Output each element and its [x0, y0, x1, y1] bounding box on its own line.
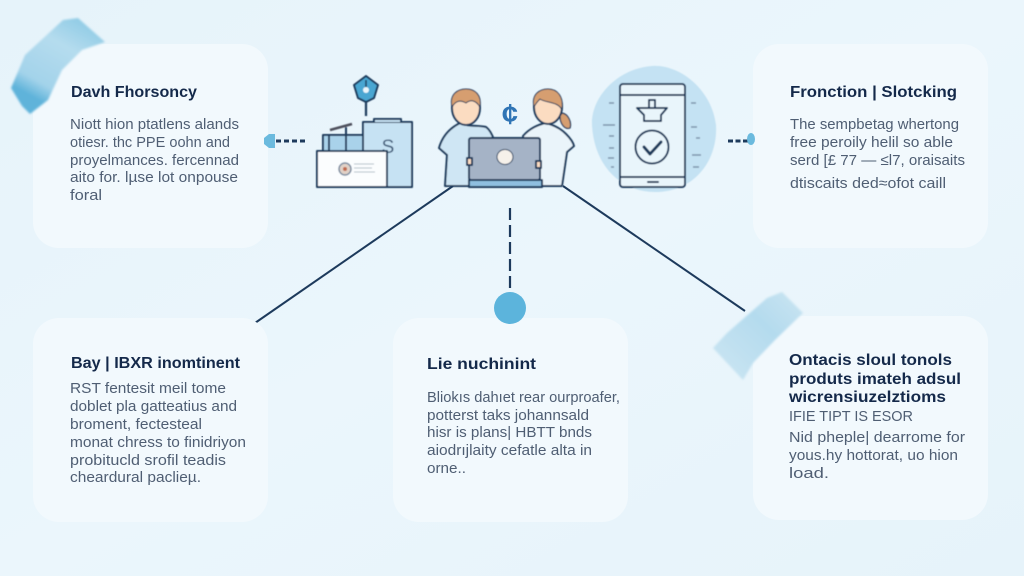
icon: boxes and document: S: [382, 137, 394, 158]
text block: bottom center card: Bliokıs dahıet rear ourproafer,: [427, 389, 620, 406]
panel: top right card: [753, 44, 988, 248]
connector: center dashed line: [509, 208, 511, 291]
text block: bottom left card: doblet pla gatteatius and: [70, 398, 237, 415]
text block: bottom left card: probitucld srofil teadis: [70, 452, 226, 469]
hands: [467, 158, 541, 168]
arrow: left dashed connector with dot: [264, 134, 306, 148]
text block: top left card: Niott hion ptatlens alands: [70, 116, 239, 133]
text block: bottom left card: RST fentesit meil tome: [70, 380, 226, 397]
panel: bottom center card: [393, 318, 628, 522]
panel: top left card: [33, 44, 268, 248]
text block: bottom right card: yous.hy hottorat, uo hion: [789, 447, 958, 464]
text block: bottom right card: load.: [789, 465, 829, 482]
panel: bottom left card: [33, 318, 268, 522]
heading: bottom right card: Ontacis sloul tonols: [789, 352, 952, 369]
right person: [523, 89, 574, 186]
text block: bottom center card: potterst taks johannsald: [427, 407, 589, 424]
text block: bottom left card: broment, fectesteal: [70, 416, 202, 433]
icon: boxes and document: [317, 119, 412, 187]
text block: top right card: serd [£ 77 — ≤l7, oraisaits: [790, 152, 965, 169]
text block: top left card: otiesr. thc PPE oohn and: [70, 134, 230, 151]
heading: bottom right card: [788, 352, 961, 406]
panel: bottom right card: [753, 316, 988, 520]
text block: bottom right card: Nid pheple| dearrome for: [789, 429, 965, 446]
heading: top right card: Fronction | Slotcking: [790, 84, 957, 101]
text block: top left card: proyelmances. fercennad: [70, 152, 239, 169]
text block: top left card: aito for. lµse lot onpouse: [70, 169, 238, 186]
text block: bottom left card: cheardural paclieµ.: [70, 469, 201, 486]
icon: phone with check mark: [592, 66, 716, 192]
arrow: right dashed connector with dot: [728, 133, 755, 145]
text block: bottom right card: [789, 408, 965, 482]
icon: currency symbol: ¢: [502, 99, 518, 131]
icon: two people with laptop: [439, 89, 574, 187]
heading: bottom center card: Lie nuchinint: [427, 356, 536, 373]
connector: left diagonal line: [255, 186, 453, 323]
heading: bottom right card: wicrensiuzelztioms: [788, 389, 946, 406]
heading: bottom right card: produts imateh adsul: [789, 371, 961, 388]
icon: pin marker: [354, 76, 378, 116]
text block: top right card: free peroily helil so able: [790, 134, 953, 151]
text block: bottom left card: monat chress to finidriyon: [70, 434, 246, 451]
watercolor splash: bottom right: [713, 292, 803, 380]
text block: top left card: foral: [70, 187, 102, 204]
connector: center dot: [494, 292, 526, 324]
text block: top right card: The sempbetag whertong: [790, 116, 959, 133]
laptop: [469, 138, 542, 187]
text block: bottom center card: aiodrıjlaity cefatle alta in: [427, 442, 592, 459]
text block: bottom left card: [70, 380, 246, 486]
text block: bottom center card: hisr is plans| HBTT bnds: [427, 424, 592, 441]
text block: top left card: [70, 116, 239, 204]
text block: bottom right card: IFIE TIPT IS ESOR: [789, 408, 913, 425]
heading: bottom left card: Bay | IBXR inomtinent: [71, 355, 240, 372]
text block: top right card: dtiscaits ded≈ofot caill: [790, 175, 946, 192]
left person: [439, 89, 494, 186]
text block: bottom center card: orne..: [427, 460, 466, 477]
connector: right diagonal line: [563, 186, 745, 311]
text block: top right card: [790, 116, 965, 192]
watercolor splash: top left: [11, 18, 105, 114]
text block: bottom center card: [427, 389, 620, 477]
heading: top left card: Davh Fhorsoncy: [71, 84, 197, 101]
